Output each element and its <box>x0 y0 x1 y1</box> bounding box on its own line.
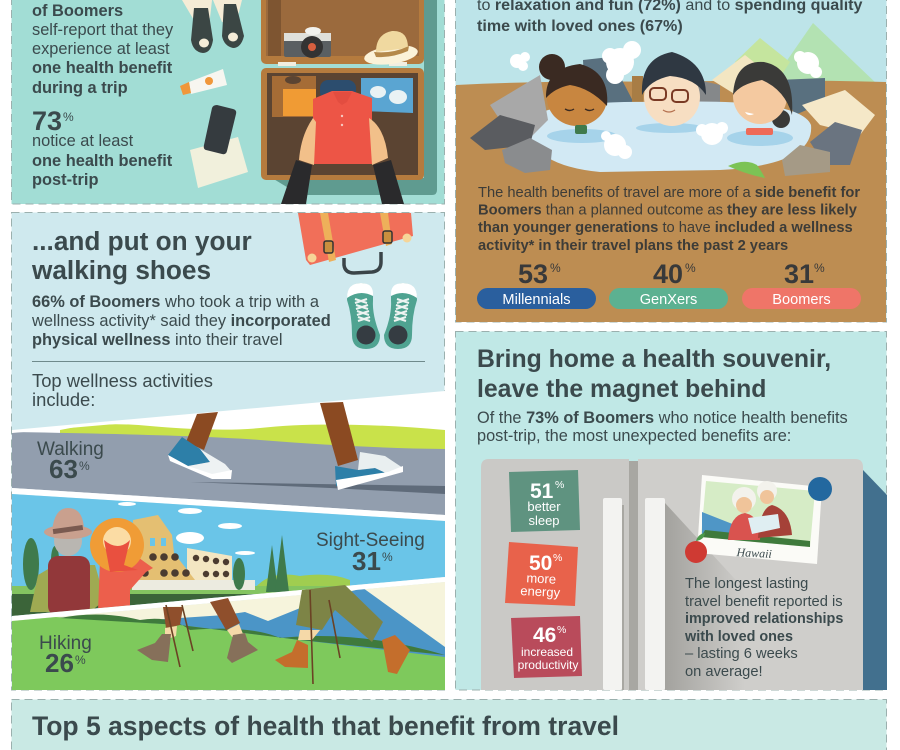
heading: bring home a health souvenir: leave the magnet behind <box>477 376 766 403</box>
sticky note: more energy: more <box>526 570 556 587</box>
stat: 73 percent post-trip <box>32 106 173 189</box>
stat: boomers 31 percent: % <box>814 261 825 275</box>
heading: top 5 aspects of health: Top 5 aspects of health that benefit from travel <box>32 711 619 741</box>
text: longest lasting benefit: with loved ones <box>684 629 793 645</box>
text: longest lasting benefit: – lasting 6 weeks <box>685 646 798 662</box>
stat: millennials 53 percent <box>477 259 596 309</box>
heading: bring home a health souvenir: Bring home a health souvenir, <box>477 346 831 373</box>
illustration: tourist couple from behind <box>30 508 153 616</box>
label: walking 63 percent: % <box>79 459 90 473</box>
label: walking 63 percent: 63 <box>49 454 78 484</box>
heading: bring home a health souvenir <box>477 346 831 403</box>
label: sight-seeing 31 percent: 31 <box>352 546 381 576</box>
sticky note: more energy: % <box>553 552 562 564</box>
label: sight-seeing 31 percent <box>316 530 425 576</box>
scene: walking <box>12 390 445 520</box>
label: hiking 26 percent: 26 <box>45 648 74 678</box>
icon: rocks behind pool <box>583 55 825 115</box>
text: side benefit for boomers: The health benefits of travel are more of a side benefit for <box>478 185 860 201</box>
text: boomers self-report benefit during trip: self-report that they <box>32 21 174 39</box>
icon: orange folded shirt <box>272 76 316 117</box>
stat: millennials 53 percent: % <box>550 261 561 275</box>
text: 66 percent of boomers: 66% of Boomers who took a trip with a <box>32 293 320 311</box>
icon: steam clouds <box>510 41 822 159</box>
text: boomers self-report benefit during trip: during a trip <box>32 79 128 97</box>
illustration: woman with dark hair <box>727 62 793 146</box>
icon: straw hat <box>363 31 419 68</box>
label: hiking 26 percent: % <box>75 653 86 667</box>
text: longest lasting benefit: on average! <box>685 664 763 680</box>
icon: swim flippers <box>182 0 244 53</box>
text: 66 percent of boomers: physical wellness into their travel <box>32 331 283 349</box>
panel: top 5 aspects <box>12 700 886 750</box>
icon: phone on a map <box>190 105 248 188</box>
panel: health souvenir <box>456 332 887 690</box>
sticky note: more energy: energy <box>520 583 561 600</box>
sticky note: better sleep <box>509 470 580 532</box>
stat: millennials 53 percent: Millennials <box>502 292 571 308</box>
label: walking 63 percent: Walking <box>37 439 104 460</box>
sticky note: increased productivity: productivity <box>518 658 578 672</box>
text: boomers self-report benefit during trip <box>32 2 174 97</box>
icon: red suitcase <box>298 213 413 273</box>
text: boomers self-report benefit during trip: experience at least <box>32 40 170 58</box>
illustration: hot spring scene <box>455 23 887 322</box>
label: hiking 26 percent <box>39 633 92 678</box>
heading: and put on your walking shoes <box>31 226 252 285</box>
sticky note: increased productivity <box>511 616 582 678</box>
stat: 73 percent post-trip: post-trip <box>32 171 98 189</box>
text: side benefit for boomers: than younger generations to have included a wellness <box>478 220 853 236</box>
icon: green sneakers <box>347 283 417 349</box>
icon: blue magnet <box>808 477 832 501</box>
label: sight-seeing 31 percent: Sight-Seeing <box>316 530 425 551</box>
sticky note: increased productivity: increased <box>521 645 573 659</box>
stat: 73 percent post-trip: % <box>63 110 74 124</box>
stat: genxers 40 percent <box>609 259 728 309</box>
text: boomers self-report benefit during trip: one health benefit <box>32 59 173 77</box>
divider band <box>12 577 445 621</box>
stat: genxers 40 percent: % <box>685 261 696 275</box>
label: sight-seeing 31 percent: % <box>382 550 393 564</box>
text: longest lasting benefit: The longest lasting <box>685 576 808 592</box>
panel: walking shoes <box>12 212 445 695</box>
icon: red polo shirt <box>313 91 372 164</box>
icon: green leaf <box>728 162 765 178</box>
text: most unexpected benefits: Of the 73% of Boomers who notice health benefits <box>477 409 848 427</box>
sticky note: better sleep: % <box>555 479 564 491</box>
text: longest lasting benefit: travel benefit reported is <box>685 594 843 610</box>
text: longest lasting benefit <box>684 576 843 680</box>
illustration: hands holding shirt <box>281 118 404 204</box>
label: hiking 26 percent: Hiking <box>39 633 92 654</box>
stat: 73 percent post-trip: notice at least <box>32 132 134 150</box>
illustration: walking legs and blue shoes <box>168 402 403 490</box>
icon: world map <box>361 78 413 113</box>
sticky note: increased productivity: % <box>557 624 566 636</box>
sticky note: more energy: 50 <box>529 552 552 575</box>
illustration: man with glasses <box>636 52 706 133</box>
text: 66 percent of boomers: wellness activity* said they incorporated <box>31 312 331 330</box>
stat: genxers 40 percent: 40 <box>653 259 683 289</box>
panel: relaxation and hot spring <box>455 0 887 322</box>
text: side benefit for boomers: activity* in their travel plans the past 2 years <box>478 238 788 254</box>
icon: rocks right <box>782 90 875 176</box>
text: longest lasting benefit: improved relationships <box>685 611 843 627</box>
sticky note: more energy <box>505 542 578 606</box>
photo: hawaii couple: Hawaii <box>735 545 772 561</box>
illustration: open suitcase <box>261 0 437 204</box>
text: side benefit for boomers: Boomers than a planned outcome as they are less likely <box>478 202 858 218</box>
panel: health benefit statistics <box>12 0 444 204</box>
icon: camera <box>284 27 331 58</box>
text: top wellness activities <box>32 370 213 410</box>
text: 66 percent of boomers <box>31 293 331 349</box>
scene: sight-seeing <box>12 490 445 622</box>
icon: flip flops in suitcase <box>320 80 356 100</box>
sticky note: better sleep: sleep <box>528 513 560 528</box>
icon: apple magnet <box>685 533 707 563</box>
sticky note: better sleep: 51 <box>530 480 554 503</box>
label: walking 63 percent <box>37 439 104 484</box>
photo: hawaii couple <box>697 475 822 564</box>
text: top wellness activities: Top wellness activities <box>32 370 213 391</box>
sticky note: increased productivity: 46 <box>533 624 556 647</box>
icon: cypress trees <box>23 535 289 592</box>
text: boomers self-report benefit during trip: of Boomers <box>32 2 123 20</box>
stat: 73 percent post-trip: 73 <box>32 106 62 136</box>
divider band <box>12 488 445 521</box>
text: top wellness activities: include: <box>32 389 95 410</box>
stat: genxers 40 percent: GenXers <box>640 292 697 308</box>
stat: millennials 53 percent: 53 <box>518 259 548 289</box>
scene: hiking <box>12 575 445 695</box>
stat: 73 percent post-trip: one health benefit <box>32 152 173 170</box>
illustration: woman with bun <box>539 54 617 143</box>
text: most unexpected benefits: post-trip, the most unexpected benefits are: <box>477 427 791 445</box>
stat: boomers 31 percent: 31 <box>784 259 814 289</box>
heading: and put on your walking shoes: ...and put on your <box>32 226 252 256</box>
illustration: fridge <box>481 459 887 690</box>
stat: boomers 31 percent: Boomers <box>772 292 831 308</box>
heading: and put on your walking shoes: walking shoes <box>31 255 211 285</box>
illustration: hikers legs, boots and poles <box>137 585 410 684</box>
icon: sunscreen tube <box>180 69 227 95</box>
sticky note: better sleep: better <box>527 499 561 514</box>
icon: rocks left <box>470 75 552 173</box>
text: relaxation and fun: time with loved ones (67%) <box>477 17 683 35</box>
text: side benefit for boomers <box>478 185 860 254</box>
illustration: colosseum <box>132 515 255 590</box>
text: relaxation and fun <box>477 0 863 35</box>
text: most unexpected benefits <box>477 409 848 445</box>
stat: boomers 31 percent <box>742 259 861 309</box>
